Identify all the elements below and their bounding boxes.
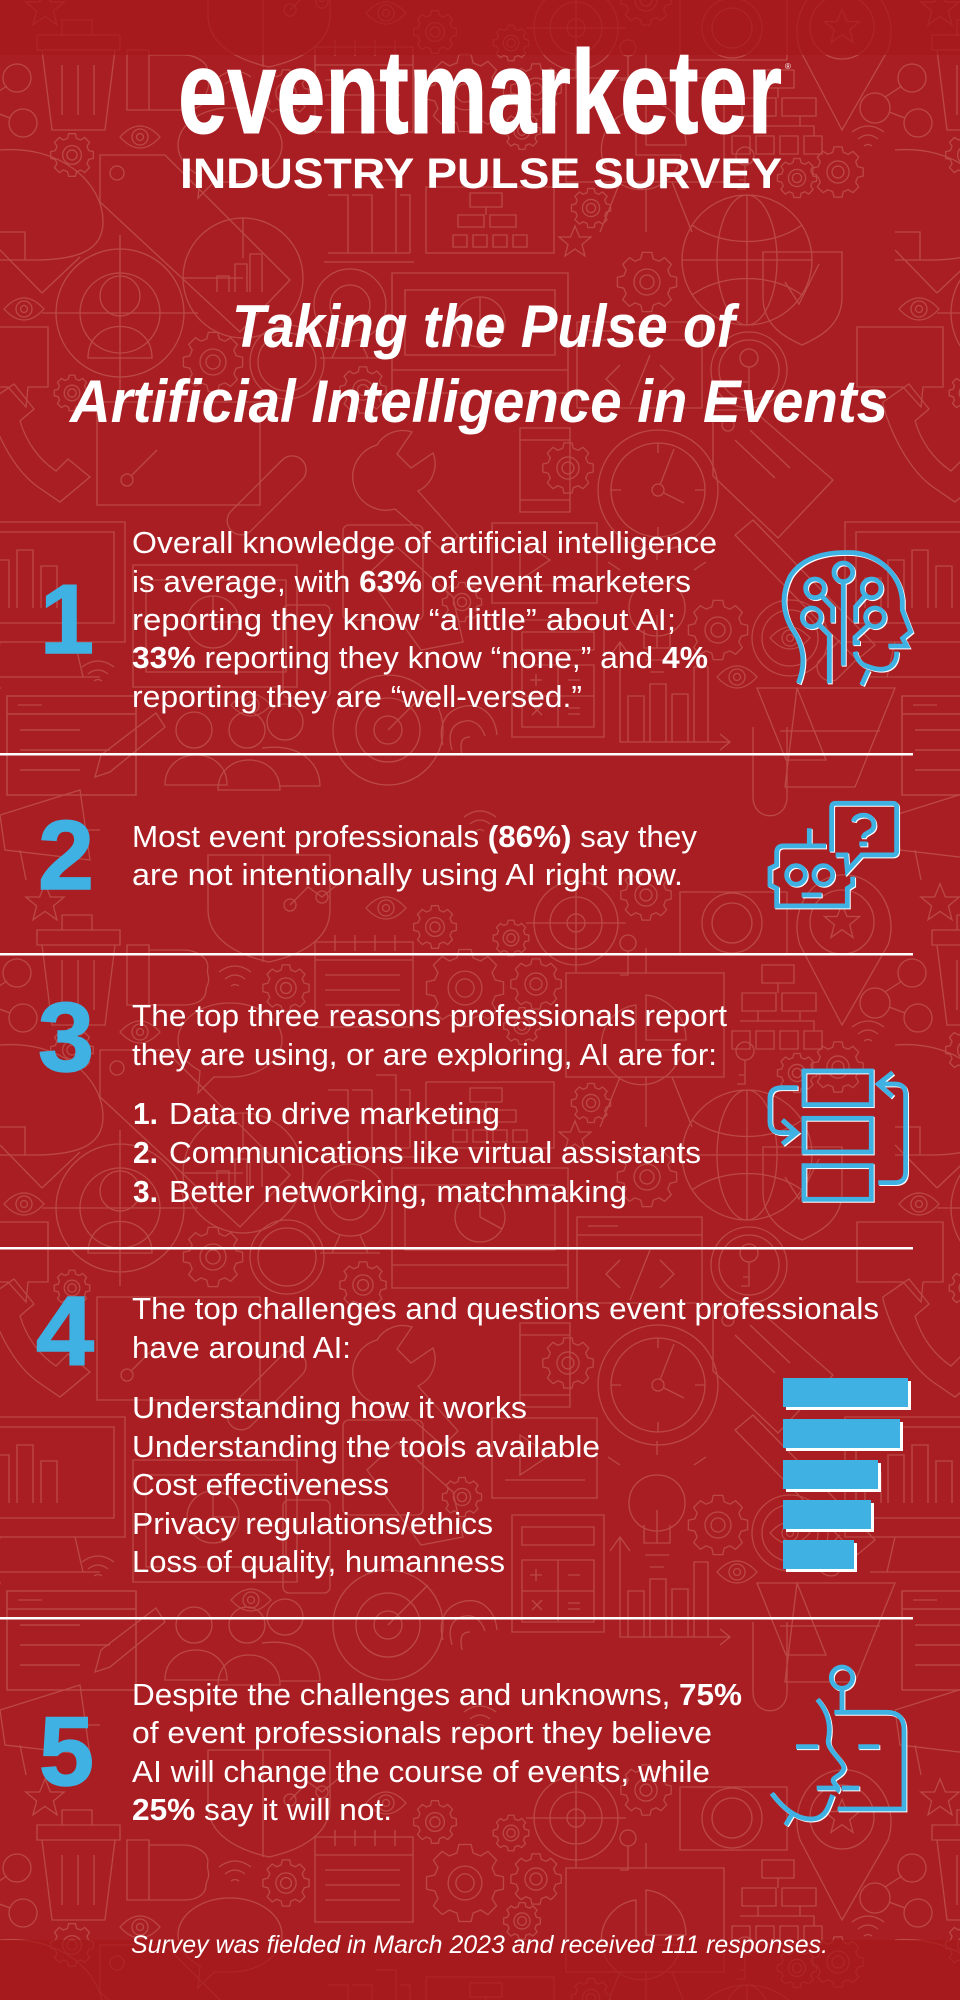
text block 1 [132,526,717,714]
divider [0,753,913,756]
panel: finding 3 [38,982,906,1209]
text block 5: Despite the challenges and unknowns, 75% [132,1678,742,1712]
text block 5: of event professionals report they believe [132,1716,712,1750]
text block 3 [132,999,728,1072]
text block 5: 25% say it will not. [132,1793,392,1827]
list: top challenges: Understanding the tools available [132,1430,600,1464]
icon: process flow boxes [770,1071,906,1199]
text block 5 [132,1678,742,1827]
number 1: 1 [40,564,94,674]
divider [0,1247,913,1250]
text block 1: is average, with 63% of event marketers [132,565,691,599]
text block 1: Overall knowledge of artificial intelligence [132,526,717,560]
text block 1: reporting they are “well-versed.” [132,680,582,714]
title [68,293,888,435]
subtitle: industry pulse survey: INDUSTRY PULSE SURVEY [180,150,782,198]
text block 4: The top challenges and questions event professionals [132,1292,879,1326]
list: top challenges: Privacy regulations/ethics [132,1507,493,1541]
list: top three reasons: 3. [133,1175,158,1209]
list: top three reasons: Communications like virtual assistants [169,1136,701,1170]
text block 2: are not intentionally using AI right now. [132,858,683,892]
icon: robot with question bubble [770,803,897,906]
logo: eventmarketer: ® [785,62,791,71]
icon: robot and human profile [772,1667,904,1825]
list: top three reasons: 1. [133,1097,158,1131]
footer note: Survey was fielded in March 2023 and received 111 responses. [131,1931,828,1959]
text block 4 [132,1292,879,1365]
list: top challenges: Loss of quality, humanness [132,1545,505,1579]
panel: finding 5 [39,1667,904,1827]
divider [0,953,913,956]
list: top challenges: Understanding how it works [132,1391,527,1425]
text block 2: Most event professionals (86%) say they [132,820,698,854]
text block 3: they are using, or are exploring, AI are for: [132,1038,717,1072]
list: top challenges: Cost effectiveness [132,1468,389,1502]
text block 3: The top three reasons professionals report [132,999,728,1033]
number 2: 2 [38,800,94,910]
divider [0,1617,913,1620]
icon: descending bar chart [783,1378,911,1572]
list: top three reasons [133,1097,701,1209]
list: top three reasons: Data to drive marketing [169,1097,500,1131]
title: Artificial Intelligence in Events [68,368,888,435]
panel: finding 4 [36,1276,911,1579]
panel: finding 1 [40,526,911,714]
number 5: 5 [39,1696,94,1806]
icon: AI brain head [784,553,911,685]
list: top three reasons: 2. [133,1136,158,1170]
number 4: 4 [36,1276,94,1386]
list: top three reasons: Better networking, matchmaking [169,1175,627,1209]
number 3: 3 [38,982,94,1092]
list: top challenges [132,1391,600,1579]
text block 1: 33% reporting they know “none,” and 4% [132,641,708,675]
text block 5: AI will change the course of events, while [132,1755,710,1789]
title: Taking the Pulse of [232,293,740,360]
panel: finding 2 [38,800,897,910]
text block 4: have around AI: [132,1331,351,1365]
text block 1: reporting they know “a little” about AI; [132,603,676,637]
text block 2 [132,820,698,892]
